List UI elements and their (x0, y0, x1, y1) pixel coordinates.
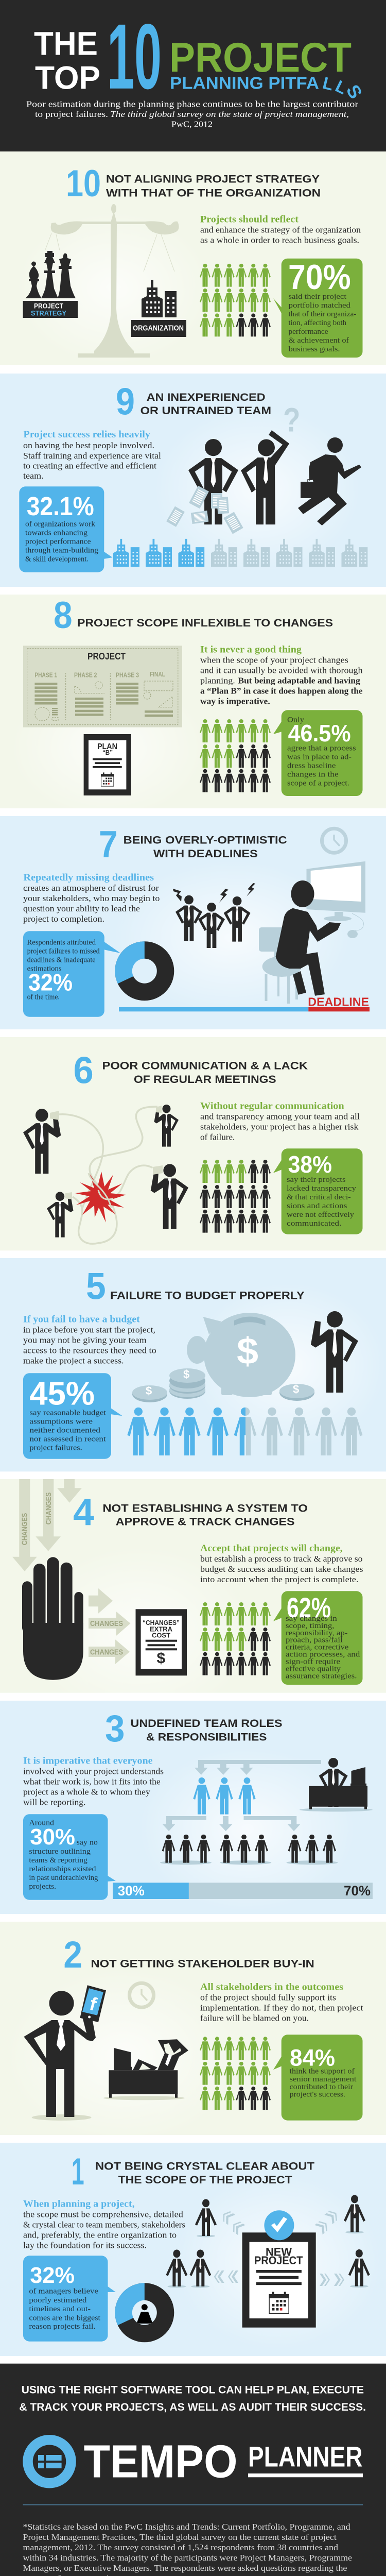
text: repeatedly missing deadlines: your stakeholders, who may begin to (23, 893, 160, 903)
callout: 30%: teams & reporting (29, 1856, 87, 1865)
title: planning pitfalls: L (332, 76, 350, 98)
text: accept that projects will change: but establish a process to track & approve so (200, 1554, 362, 1564)
text: all stakeholders: All stakeholders in the outcomes (200, 1982, 343, 1993)
icon: new project document: NEW (266, 2245, 292, 2258)
callout: 45%: neither documented (29, 1427, 101, 1435)
org chart: bottom arrows (163, 1816, 301, 1831)
heading: title 3 (131, 1717, 282, 1743)
heading: title 2: NOT GETTING STAKEHOLDER BUY-IN (91, 1957, 314, 1970)
callout: 32% of managers: 32% (30, 2263, 75, 2288)
diagram: project phases: PHASE 2 (74, 671, 97, 679)
icon: person (311, 1311, 358, 1393)
arrows: incoming changes: CHANGES (21, 1513, 29, 1545)
callout: 62%: responsibility, ap- (286, 1629, 348, 1637)
heading: title 6 (102, 1059, 308, 1086)
icon: scattered papers (166, 486, 243, 534)
icon: person running with briefcase (298, 437, 361, 526)
text: it is never a good thing: a “Plan B” in case it does happen along the (200, 686, 362, 696)
callout: 62%: action processes, and (286, 1651, 360, 1659)
text: accept that projects will change: into account when the project is complete. (200, 1574, 358, 1584)
icon: coins: $ (293, 1383, 299, 1396)
callout: 30%: structure outlining (29, 1848, 91, 1856)
text: repeatedly missing deadlines: question your ability to lead the (23, 904, 140, 913)
org chart: top arrows (195, 1760, 321, 1775)
heading: number 7: 7 (99, 823, 118, 865)
icon: person with phone (24, 1985, 106, 2121)
icon: piggy bank: $ (237, 1331, 258, 1372)
heading: title 8: PROJECT SCOPE INFLEXIBLE TO CHANGES (77, 617, 333, 629)
heading: title 7: WITH DEADLINES (153, 848, 258, 860)
icon: computer monitor and desk (307, 861, 365, 938)
text: project success: Project success relies heavily (23, 430, 151, 440)
org chart: shadows (160, 1860, 338, 1865)
callout: 30%: Around (29, 1819, 55, 1827)
text: projects should reflect: Projects should reflect (200, 215, 299, 225)
panel: pitfall 10 (0, 151, 386, 366)
chart: people row 45% (127, 1408, 363, 1455)
callout: 62% (273, 1591, 362, 1685)
panel: pitfall 7 (0, 816, 386, 1029)
callout: 45% (23, 1373, 122, 1459)
panel: footer (0, 2363, 386, 2576)
text: it is imperative: project as a whole & to whom they (23, 1787, 151, 1797)
icon: changes document: “CHANGES” (143, 1619, 180, 1626)
icon: changes document (136, 1609, 187, 1675)
text: all stakeholders: of the project should fully support its (200, 1993, 336, 2003)
intro text (26, 99, 359, 129)
icon: angry stakeholders (173, 883, 255, 948)
label: organization: ORGANIZATION (133, 324, 184, 333)
title: the top: TOP (35, 60, 100, 96)
callout: 46.5%: dress baseline (287, 762, 336, 770)
chart: organizations row (113, 539, 367, 567)
text: when planning a project: & crystal clear to team members, stakeholders (23, 2219, 185, 2229)
callout: 30%: in past underachieving (29, 1874, 98, 1882)
heading: title 1: NOT BEING CRYSTAL CLEAR ABOUT (95, 2160, 314, 2172)
callout: 32% of managers: poorly estimated (29, 2296, 87, 2304)
text: repeatedly missing deadlines: Repeatedly missing deadlines (23, 873, 154, 883)
title: planning pitfalls: PLANNING PITFA (170, 74, 319, 93)
panel: pitfall 4 (0, 1479, 386, 1721)
icon: person hands on hips (188, 439, 238, 524)
diagram: project phases: PHASE 1 (34, 671, 57, 679)
callout: 32% of managers: of managers believe (29, 2287, 98, 2296)
text: accept that projects will change: budget & success auditing can take changes (200, 1564, 363, 1574)
callout: 32% of managers: comes are the biggest (29, 2314, 100, 2322)
logo: tempo planner: TEMPO (84, 2436, 238, 2487)
icon: person with cup A (23, 1109, 61, 1174)
callout: 38%: & that critical deci- (287, 1193, 351, 1201)
timeline: deadline bar (119, 995, 370, 1011)
panel: pitfall 9 (0, 374, 386, 587)
callout: 70%: performance (288, 328, 328, 336)
org chart: blue team leads (193, 1777, 256, 1815)
icon: person with phone: f (87, 1993, 99, 2015)
diagram: project phases (23, 646, 182, 727)
heading: title 9 (141, 391, 271, 417)
text: when planning a project: and, preferably, the entire organization to (23, 2230, 177, 2240)
callout: 32%: deadlines & inadequate (27, 956, 96, 964)
callout: 84%: 84% (290, 2044, 335, 2071)
chart: 30/70 bar: 70% (344, 1883, 371, 1899)
arrows: incoming changes (12, 1479, 82, 1571)
callout: 46.5% (273, 710, 362, 796)
callout: 38%: 38% (288, 1151, 332, 1178)
icon: person with cup C (47, 1192, 73, 1238)
heading: title 1 (95, 2160, 314, 2186)
text: without regular communication: stakeholders, your project has a higher risk (200, 1122, 359, 1131)
text: without regular communication: and transparency among your team and all (200, 1111, 360, 1121)
chart: donut with person (115, 2283, 174, 2342)
icon: tangled string wires (59, 1107, 157, 1244)
icon: changes document: COST (152, 1632, 170, 1639)
callout: 32%: estimations (27, 964, 62, 973)
text: without regular communication (200, 1101, 360, 1142)
icon: person with cup D (151, 1164, 188, 1229)
text: project success: on having the best people involved. (23, 440, 154, 450)
arrows: changes into document (89, 1588, 131, 1664)
heading: number 10: 10 (66, 163, 101, 205)
callout: 46.5%: 46.5% (288, 720, 351, 747)
logo: tempo planner (28, 2436, 363, 2487)
callout: 62%: proach, pass/fail (286, 1636, 343, 1645)
text: project success: to creating an effective and efficient (23, 461, 156, 471)
panel: pitfall 6 (0, 1037, 386, 1250)
intro text: Poor estimation during the planning phase continues to be the largest contributor (26, 99, 359, 109)
callout: 84% (273, 2035, 362, 2121)
text: it is imperative: It is imperative that everyone (23, 1756, 152, 1766)
icon: organization building (142, 280, 177, 317)
label: project strategy (23, 301, 78, 318)
chart: 30/70 bar (113, 1883, 373, 1899)
icon: plan b document (84, 734, 131, 795)
heading: title 6: POOR COMMUNICATION & A LACK (102, 1059, 308, 1072)
text: projects should reflect: as a whole in order to reach business goals. (200, 235, 359, 245)
chart: 30/70 bar: 30% (118, 1883, 145, 1899)
callout: 38% (273, 1148, 362, 1234)
icon: new project document (242, 2210, 316, 2328)
icon: chess pieces (25, 251, 76, 298)
callout: 32% of managers (23, 2256, 116, 2342)
callout: 46.5%: was in place to ad- (287, 753, 352, 761)
callout: 84%: think the support of (289, 2067, 355, 2075)
heading: title 5: FAILURE TO BUDGET PROPERLY (110, 1290, 305, 1302)
text: statistics note: within 34 industries. The majority of the participants were Project Managers, Programme (23, 2553, 352, 2563)
title: planning pitfalls: L (321, 73, 336, 94)
icon: direction chevrons (214, 2208, 344, 2286)
heading: title 9: AN INEXPERIENCED (147, 391, 266, 403)
icon: question mark: ? (283, 401, 301, 439)
text: project success: team. (23, 471, 44, 481)
text: repeatedly missing deadlines (23, 873, 160, 924)
org chart: team members (162, 1835, 336, 1863)
callout: 32% (23, 931, 120, 1017)
text: it is never a good thing: when the scope of your project changes (200, 655, 348, 665)
heading: title 10 (106, 173, 321, 199)
callout: 32%: Respondents attributed (27, 938, 96, 946)
text: without regular communication: Without regular communication (200, 1101, 344, 1111)
text: when planning a project: lay the foundation for its success. (23, 2240, 147, 2250)
diagram: project phases: PROJECT (87, 651, 126, 662)
text: repeatedly missing deadlines: project to completion. (23, 914, 104, 924)
panel: pitfall 1 (0, 2143, 386, 2356)
text: it is imperative: involved with your project understands (23, 1766, 164, 1776)
heading: title 10: WITH THAT OF THE ORGANIZATION (106, 187, 321, 199)
callout: 84%: project's success. (289, 2090, 345, 2098)
chart: people grid 70% (200, 264, 271, 336)
arrows: changes into document: CHANGES (90, 1649, 123, 1657)
icon: coins: $ (183, 1368, 189, 1381)
text: statistics note (23, 2522, 352, 2576)
heading: number 9: 9 (116, 381, 135, 422)
call to action (19, 2384, 366, 2413)
heading: title 7 (124, 834, 287, 860)
text: if you fail to have a budget: in place before you start the project, (23, 1325, 155, 1335)
callout: 30%: 30% (30, 1824, 75, 1850)
text: all stakeholders: failure will be blamed on you. (200, 2013, 309, 2023)
callout: 30%: relationships existed (29, 1865, 96, 1873)
icon: balance scale (45, 204, 179, 358)
heading: number 4: 4 (73, 1492, 94, 1534)
heading: title 4: APPROVE & TRACK CHANGES (116, 1516, 295, 1528)
icon: changes document: EXTRA (150, 1625, 173, 1633)
callout: 70%: business goals. (288, 345, 340, 353)
callout: 30%: projects. (29, 1883, 56, 1891)
text: it is never a good thing: planning. (200, 676, 235, 686)
callout: 70%: & achievement of (288, 336, 349, 345)
chart: people grid 84% (200, 2037, 271, 2110)
title: planning pitfalls: S (342, 81, 366, 102)
panel: pitfall 2 (0, 1922, 386, 2143)
callout: 32% of managers: reason projects fail. (29, 2323, 96, 2331)
text: accept that projects will change: Accept that projects will change, (200, 1544, 343, 1554)
callout: 32% of managers: timelines and out- (29, 2305, 91, 2313)
callout: 32.1%: 32.1% (27, 492, 94, 521)
call to action: & TRACK YOUR PROJECTS, AS WELL AS AUDIT THEIR SUCCESS. (19, 2401, 366, 2413)
text: statistics note: *Statistics are based on the PwC Insights and Trends: Current Portfolio, Programme, and (23, 2522, 350, 2532)
callout: 32.1%: & skill development. (25, 555, 89, 564)
text: it is imperative (23, 1756, 164, 1807)
title: planning pitfalls (170, 73, 366, 102)
callout: 32.1%: project performance (25, 538, 91, 546)
callout: 84%: senior management (289, 2075, 356, 2083)
icon: wires over burst (89, 1173, 113, 1208)
text: all stakeholders (200, 1982, 363, 2023)
text: accept that projects will change (200, 1544, 363, 1584)
text: if you fail to have a budget: make the project a success. (23, 1356, 124, 1366)
callout: 84%: contributed to their (289, 2083, 353, 2091)
callout: 32.1% (19, 486, 113, 572)
text: project success (23, 430, 161, 481)
callout: 62%: effective quality (286, 1665, 341, 1673)
callout: 62%: 62% (287, 1591, 331, 1623)
callout: 70% (273, 258, 362, 358)
callout: 45%: say reasonable budget (29, 1409, 106, 1417)
icon: person relaxing at desk (103, 2039, 188, 2100)
call to action: USING THE RIGHT SOFTWARE TOOL CAN HELP PLAN, EXECUTE (22, 2384, 364, 2396)
callout: 30%: say no (77, 1839, 98, 1847)
heading: title 1: THE SCOPE OF THE PROJECT (118, 2174, 292, 2186)
chart: people grid 46.5% (200, 719, 271, 792)
text: projects should reflect: and enhance the strategy of the organization (200, 225, 361, 235)
callout: 70%: portfolio matched (288, 301, 351, 310)
text: statistics note: Project Management Practices, The third global survey on the current state of project (23, 2532, 337, 2542)
panel: pitfall 3 (0, 1701, 386, 1914)
text: if you fail to have a budget: you may not be giving your team (23, 1335, 147, 1345)
text: it is never a good thing (200, 645, 363, 706)
callout: 32%: of the time. (27, 993, 60, 1001)
callout: 38%: say their projects (287, 1176, 346, 1184)
callout: 62%: say changes in (286, 1615, 338, 1623)
heading: title 3: & RESPONSIBILITIES (146, 1731, 267, 1743)
icon: chair (259, 927, 302, 1004)
heading: number 3: 3 (105, 1708, 125, 1750)
callout: 62%: criteria, corrective (286, 1643, 348, 1652)
text: it is never a good thing: But being adaptable and having (238, 676, 360, 686)
icon: changes document: $ (156, 1650, 166, 1667)
callout: 46.5%: changes in the (287, 771, 339, 779)
text: it is never a good thing: way is imperative. (200, 697, 270, 706)
callout: 62%: sign-off require (286, 1658, 340, 1666)
text: when planning a project: When planning a project, (23, 2199, 135, 2209)
text: project success: Staff training and experience are vital (23, 451, 161, 461)
text: if you fail to have a budget (23, 1315, 156, 1366)
chart: people grid 62% (200, 1602, 271, 1675)
text: if you fail to have a budget: access to the resources they need to (23, 1346, 156, 1355)
text: when planning a project (23, 2199, 185, 2250)
icon: person scratching head (241, 430, 289, 524)
callout: 32.1%: towards enhancing (25, 529, 87, 537)
icon: plan b document: PLAN (97, 742, 117, 751)
callout: 62%: scope, timing, (286, 1622, 335, 1630)
panel: pitfall 5 (0, 1258, 386, 1471)
title: the top: THE (34, 25, 98, 62)
logo: tempo planner: PLANNER (248, 2440, 362, 2472)
icon: manager at desk (300, 1758, 373, 1811)
callout: 32%: 32% (28, 969, 73, 996)
callout: 70%: tion, affecting both (288, 319, 347, 327)
icon: coins (132, 1368, 314, 1402)
icon: red burst (75, 1172, 126, 1223)
callout: 32.1%: of organizations work (25, 520, 96, 529)
icon: stakeholders around the project (166, 2195, 370, 2287)
callout: 46.5%: agree that a process (287, 744, 356, 753)
panel: pitfall 8 (0, 595, 386, 819)
title: project: PROJECT (169, 35, 352, 81)
icon: plan b document: “B” (102, 749, 113, 756)
heading: title 3: UNDEFINED TEAM ROLES (131, 1717, 282, 1730)
icon: coins: $ (146, 1384, 152, 1397)
icon: piggy bank (187, 1313, 295, 1397)
intro text: PwC, 2012 (171, 120, 213, 129)
callout: 45%: 45% (29, 1375, 95, 1412)
heading: number 1: 1 (72, 2151, 84, 2193)
heading: title 7: BEING OVERLY-OPTIMISTIC (124, 834, 287, 846)
text: without regular communication: of failure. (200, 1132, 235, 1142)
callout: 38%: communicated. (287, 1219, 341, 1228)
heading: title 4: NOT ESTABLISHING A SYSTEM TO (102, 1502, 308, 1514)
text: statistics note: Managers, or Executive Managers. The respondents were asked questions regarding the (23, 2563, 347, 2573)
title: big 10: 10 (107, 5, 162, 109)
text: when planning a project: the scope must be comprehensive, detailed (23, 2209, 184, 2219)
callout: 70%: that of their organiza- (288, 310, 357, 318)
timeline: deadline bar: DEADLINE (308, 995, 369, 1009)
heading: title 10: NOT ALIGNING PROJECT STRATEGY (106, 173, 320, 185)
callout: 32.1%: through team-building (25, 547, 98, 555)
text: it is never a good thing: and it can usually be avoided with thorough (200, 666, 363, 675)
label: organization (131, 320, 186, 337)
heading: number 8: 8 (54, 595, 73, 636)
panel: header (0, 0, 386, 151)
callout: 45%: nor assessed in recent (29, 1435, 106, 1444)
text: repeatedly missing deadlines: creates an atmosphere of distrust for (23, 883, 159, 893)
label: project strategy: STRATEGY (31, 310, 66, 317)
title: the top (34, 25, 100, 96)
intro text: The third global survey on the state of project management, (110, 109, 349, 119)
callout: 70%: 70% (288, 258, 351, 297)
icon: clock (322, 828, 346, 853)
callout: 45%: assumptions were (29, 1418, 93, 1426)
chart: donut 32% (115, 941, 174, 1001)
callout: 46.5%: Only (287, 716, 305, 724)
icon: clock (130, 1983, 153, 2007)
heading: number 6: 6 (73, 1050, 94, 1092)
icon: person with cup B (154, 1105, 179, 1147)
heading: title 4 (102, 1502, 308, 1528)
diagram: project phases: PHASE 3 (116, 671, 139, 679)
intro text: to project failures. (35, 109, 108, 119)
callout: 62%: assurance strategies. (286, 1672, 357, 1681)
callout: 46.5%: scope of a project. (287, 779, 349, 788)
text: it is never a good thing: It is never a good thing (200, 645, 302, 655)
text: projects should reflect (200, 215, 361, 245)
label: project strategy: PROJECT (34, 302, 64, 310)
callout: 38%: lacked transparency (287, 1184, 357, 1193)
text: it is imperative: what their work is, how it fits into the (23, 1776, 161, 1786)
heading: number 5: 5 (86, 1266, 106, 1308)
callout: 45%: project failures. (29, 1444, 82, 1452)
text: if you fail to have a budget: If you fail to have a budget (23, 1315, 141, 1325)
heading: title 6: OF REGULAR MEETINGS (134, 1073, 276, 1086)
callout: 70%: said their project (288, 293, 346, 301)
diagram: project phases: FINAL (150, 670, 165, 678)
text: statistics note: management, 2012. The survey consisted of 1,524 respondents from 38 countries and (23, 2543, 339, 2552)
arrows: incoming changes: CHANGES (45, 1492, 53, 1524)
heading: title 9: OR UNTRAINED TEAM (141, 404, 271, 417)
icon: new project document: PROJECT (254, 2254, 303, 2267)
callout: 32%: project failures to missed (27, 947, 100, 955)
text: it is imperative: will be reporting. (23, 1797, 85, 1807)
callout: 30% (23, 1814, 116, 1900)
icon: seated person (276, 880, 341, 996)
callout: 38%: sions and actions (287, 1202, 347, 1210)
heading: number 2: 2 (63, 1934, 82, 1976)
arrows: changes into document: CHANGES (90, 1620, 123, 1628)
callout: 38%: were not effectively (287, 1211, 355, 1219)
text: all stakeholders: implementation. If they do not, then project (200, 2003, 363, 2013)
icon: stop hand (22, 1557, 83, 1680)
chart: people grid 38% (200, 1160, 271, 1233)
